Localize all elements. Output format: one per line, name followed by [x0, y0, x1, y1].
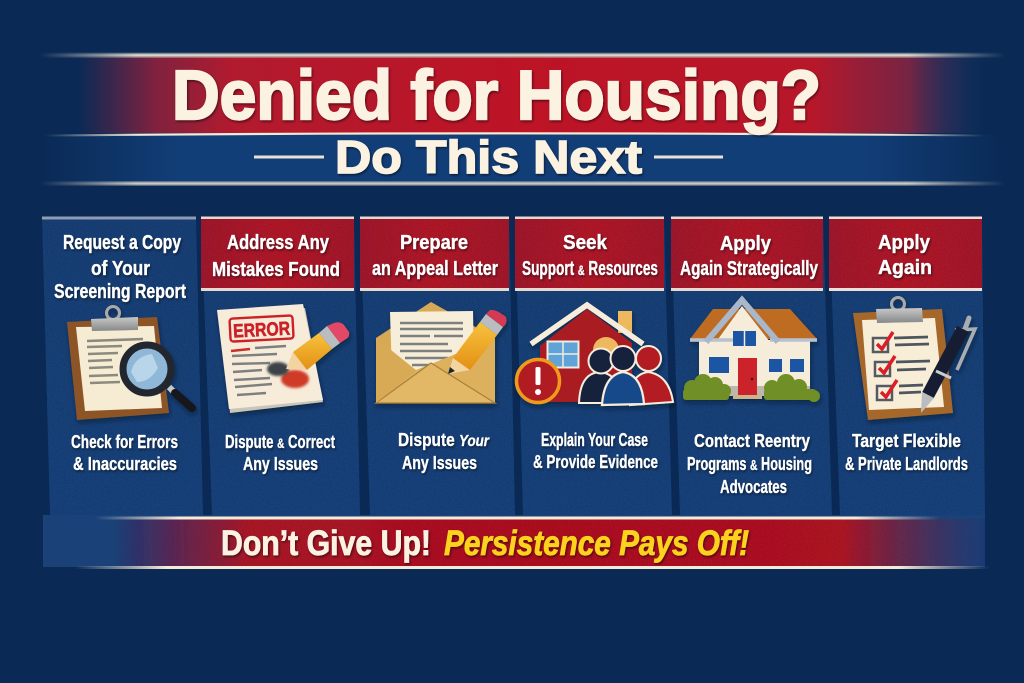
panel 4 header — [515, 217, 664, 289]
panel 3 header — [360, 217, 509, 289]
footer red band — [95, 519, 985, 567]
subtitle blue band — [40, 135, 1005, 182]
panel 2: address mistakes — [201, 216, 360, 515]
panel 4 caption: & Provide Evidence — [533, 451, 658, 472]
footer bottom rule — [75, 566, 990, 569]
panel 1: request report — [42, 216, 203, 515]
footer message — [221, 524, 749, 563]
panel 2 caption: Any Issues — [243, 453, 318, 474]
icon: checklist clipboard with pen — [853, 298, 975, 420]
panel 3: appeal letter — [360, 216, 515, 515]
panel 6 heading — [878, 231, 932, 279]
panel 4 heading — [522, 231, 658, 280]
panel 3 caption: Dispute Your — [398, 429, 490, 450]
subtitle dash right — [654, 156, 723, 158]
panel 4 background — [515, 219, 672, 515]
panel 5 header — [671, 217, 823, 289]
panel 4 heading: Support & Resources — [522, 257, 658, 280]
panel 6 caption: & Private Landlords — [845, 453, 968, 474]
panel 4 caption — [533, 429, 658, 472]
panel 2 rules — [201, 216, 354, 291]
footer top rule — [95, 516, 940, 520]
subtitle dash left — [254, 156, 324, 158]
icon: error document with pencil — [217, 304, 349, 413]
panel 1 heading: of Your — [91, 257, 150, 280]
panel 2 caption — [225, 431, 335, 474]
icon: house with alert and people — [516, 305, 673, 405]
panel 6 heading: Again — [878, 256, 932, 279]
middle rule — [45, 132, 985, 136]
panel 1 caption: & Inaccuracies — [73, 453, 177, 474]
title: Denied for Housing? — [172, 56, 821, 134]
panel 6 rules — [829, 216, 982, 291]
panel 6 header — [829, 217, 982, 289]
panel 2 heading: Address Any — [227, 231, 329, 254]
panel 1 heading: Screening Report — [54, 280, 186, 303]
panel 6 background — [829, 219, 985, 515]
panel 3 caption: Any Issues — [402, 452, 477, 473]
footer message: Persistence Pays Off! — [444, 524, 749, 563]
panel 1 caption — [71, 431, 178, 474]
panel 5 heading: Again Strategically — [680, 257, 818, 280]
panel 2 heading: Mistakes Found — [212, 258, 340, 281]
panel 1 heading — [54, 231, 186, 303]
panel 5 caption — [687, 430, 812, 497]
panel 3 rules — [360, 216, 509, 291]
panel 5 caption: Advocates — [720, 476, 787, 497]
title banner — [40, 54, 1005, 185]
panel 2 background — [201, 219, 360, 515]
panel 2 header — [201, 217, 354, 289]
panel 5 heading: Apply — [720, 232, 772, 255]
panel 4: support and resources — [515, 216, 673, 515]
panel 1 top rule — [42, 216, 196, 220]
panel 5 caption: Contact Reentry — [694, 430, 811, 451]
panel 5 rules — [671, 216, 823, 291]
panel 3 background — [360, 219, 515, 515]
panel 4 caption: Explain Your Case — [541, 429, 648, 450]
panel 3 heading: Prepare — [400, 231, 468, 254]
panel 6 caption: Target Flexible — [852, 430, 961, 451]
panel 6: apply again — [829, 216, 985, 515]
panel 3 heading — [372, 231, 498, 280]
icon: error document with pencil: ERROR — [233, 319, 291, 342]
top rule — [40, 54, 1005, 57]
panel 6 caption — [845, 430, 968, 474]
icon: envelope with letter and pencil — [376, 302, 507, 403]
panel 1 caption: Check for Errors — [71, 431, 178, 452]
panel 5 background — [671, 219, 832, 515]
panel 5: apply strategically — [671, 216, 832, 515]
panel 4 rules — [515, 216, 664, 291]
panel 2 caption: Dispute & Correct — [225, 431, 335, 452]
subtitle: Do This Next — [335, 131, 642, 183]
panel 1 background — [42, 217, 203, 515]
panel 3 caption — [398, 429, 490, 473]
panel 5 caption: Programs & Housing — [687, 453, 812, 474]
red title band — [40, 57, 1005, 133]
panel 6 heading: Apply — [878, 231, 931, 254]
panel 3 heading: an Appeal Letter — [372, 257, 498, 280]
icon: house with bushes — [683, 300, 820, 402]
panel 2 heading — [212, 231, 340, 281]
footer message: Don’t Give Up! — [221, 524, 431, 563]
panel 1 heading: Request a Copy — [63, 231, 181, 254]
bottom rule — [40, 182, 1005, 185]
icon: clipboard with magnifier — [67, 306, 192, 420]
panel 5 heading — [680, 232, 818, 280]
footer backing — [43, 515, 985, 567]
panel 4 heading: Seek — [563, 231, 608, 254]
footer banner — [75, 516, 990, 569]
